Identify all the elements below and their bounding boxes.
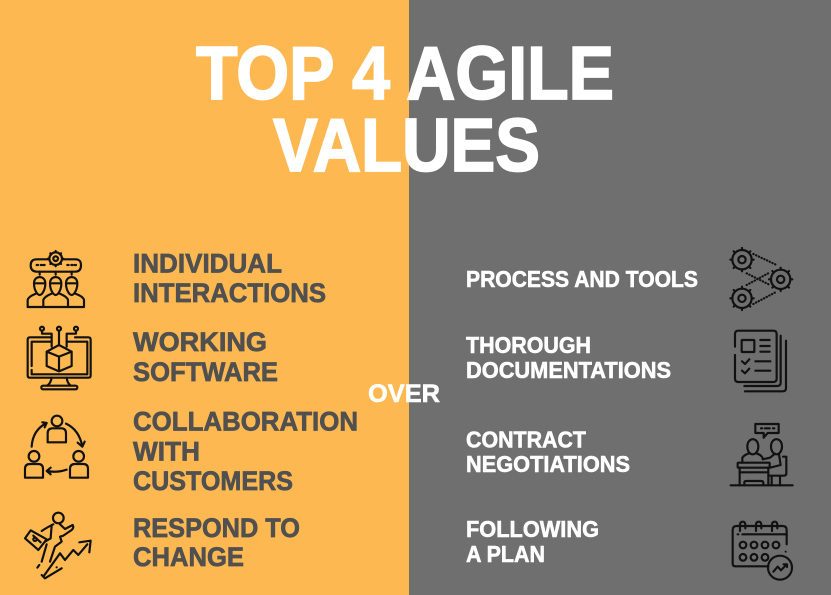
text: following a plan: FOLLOWING <box>466 516 599 542</box>
text: process and tools: PROCESS AND TOOLS <box>466 266 698 292</box>
icon: document stack <box>735 331 786 391</box>
icon: monitor with cube <box>28 327 91 389</box>
text: contract negotiations <box>466 426 630 477</box>
text: thorough documentations: THOROUGH <box>466 332 591 358</box>
text: working software <box>133 327 278 387</box>
text: thorough documentations <box>466 332 671 383</box>
icon: calendar with trend badge <box>733 522 792 580</box>
text: contract negotiations: NEGOTIATIONS <box>466 451 630 477</box>
icon: connected gears <box>730 248 792 310</box>
title <box>196 31 614 187</box>
panel: right gray background <box>409 0 831 595</box>
text: following a plan <box>466 516 599 567</box>
text: collaboration with customers <box>133 406 358 496</box>
label: over: OVER <box>368 380 440 408</box>
text: following a plan: A PLAN <box>466 541 545 567</box>
icon: collaboration cycle of people <box>25 416 88 478</box>
text: individual interactions <box>133 248 326 308</box>
text: respond to change: RESPOND TO <box>133 513 300 543</box>
text: thorough documentations: DOCUMENTATIONS <box>466 357 671 383</box>
icon: team with shared gear <box>28 251 84 307</box>
title: VALUES <box>273 103 540 187</box>
text: working software: SOFTWARE <box>133 357 278 387</box>
left column: values <box>133 248 358 572</box>
text: collaboration with customers: COLLABORATION <box>133 406 358 436</box>
text: respond to change <box>133 513 300 572</box>
text: individual interactions: INTERACTIONS <box>133 278 326 308</box>
text: individual interactions: INDIVIDUAL <box>133 248 282 278</box>
right column: values <box>466 266 698 567</box>
text: contract negotiations: CONTRACT <box>466 426 586 452</box>
text: respond to change: CHANGE <box>133 542 244 572</box>
title: TOP 4 AGILE <box>196 31 614 115</box>
text: collaboration with customers: CUSTOMERS <box>133 466 293 496</box>
icon: runner with briefcase and rising arrow <box>25 513 91 578</box>
icon: two people meeting at desk <box>731 424 793 485</box>
panel: left orange background <box>0 0 409 595</box>
text: working software: WORKING <box>133 327 267 357</box>
text: collaboration with customers: WITH <box>133 436 200 466</box>
